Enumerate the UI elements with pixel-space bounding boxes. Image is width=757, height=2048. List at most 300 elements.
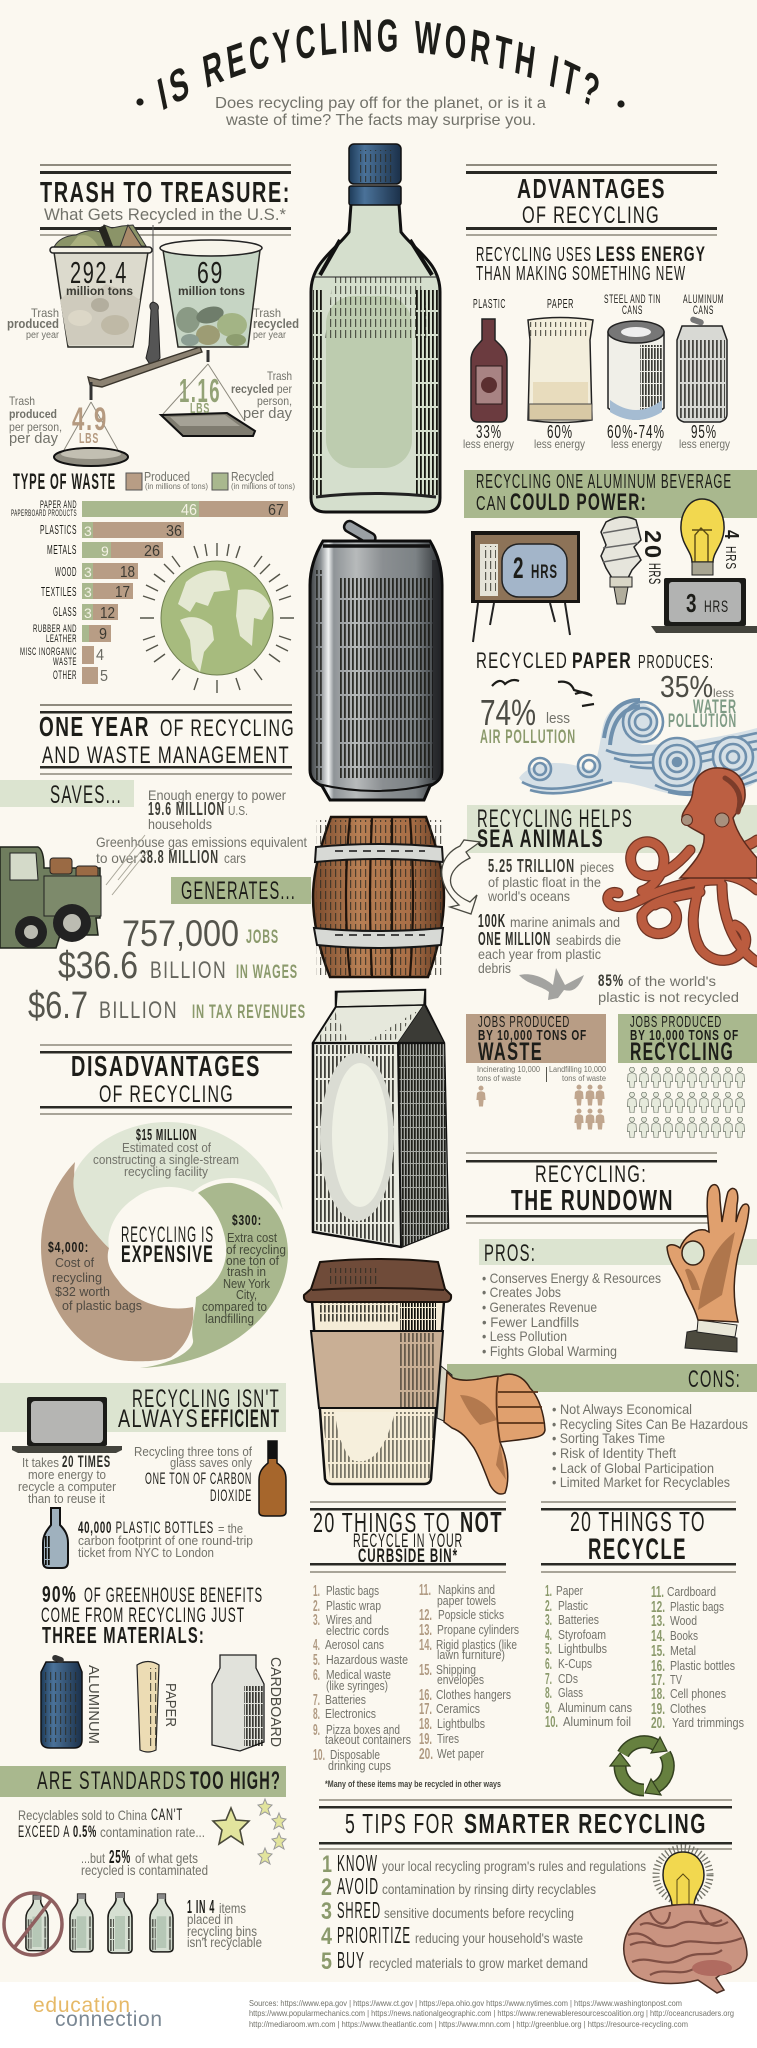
- text: energy for households: U.S.: [228, 803, 248, 818]
- banner: aluminum beverage can could power: [464, 470, 757, 518]
- bar labels: LEATHER: [46, 633, 77, 645]
- stat: 35% less water pollution: 35%: [660, 669, 713, 704]
- illustration: coffee cup: [304, 1259, 451, 1484]
- tip 5: recycled materials to grow market demand: [369, 1955, 588, 1971]
- text: 300 extra cost: compared to: [202, 1300, 267, 1314]
- stat: 757,000 jobs: 757,000: [122, 913, 239, 954]
- subheading: recycled paper produces: [476, 648, 714, 673]
- list: do not recycle column one: Plastic wrap: [326, 1598, 381, 1613]
- text: marine animals and seabirds: ONE MILLION: [478, 929, 551, 949]
- list: recycle column one: 2.: [545, 1598, 552, 1615]
- panel: 20 things to recycle: [541, 1501, 744, 1795]
- bar labels: MISC INORGANIC: [20, 646, 77, 658]
- list: do not recycle column two: 15.: [419, 1662, 432, 1679]
- icon: laptop 3 hrs: HRS: [704, 597, 729, 616]
- banner: efficient: [0, 1383, 286, 1433]
- list: do not recycle column one: Electronics: [325, 1706, 376, 1721]
- note: incinerating: Incinerating 10,000: [477, 1065, 540, 1074]
- list: do not recycle column one: 5.: [313, 1652, 320, 1669]
- text: 1 in 4 items: recycling bins: [187, 1923, 257, 1939]
- tip 3: SHRED: [337, 1897, 381, 1923]
- tip 2: AVOID: [337, 1873, 379, 1899]
- text: marine animals and seabirds: marine animals and: [510, 914, 620, 930]
- banner: saves: [0, 780, 134, 809]
- list: recycle column one: 7.: [545, 1671, 552, 1688]
- list: do not recycle column one: 7.: [313, 1692, 320, 1709]
- note: landfilling: tons of waste: [562, 1074, 607, 1083]
- bar chart: 5: [100, 668, 108, 685]
- list: do not recycle column two: Ceramics: [436, 1701, 480, 1716]
- list: do not recycle column one: 8.: [313, 1706, 320, 1723]
- legend: [126, 469, 295, 491]
- panel: are standards too high: [0, 1766, 286, 1955]
- tip 3: sensitive documents before recycling: [384, 1905, 574, 1921]
- stat: 292.4 million tons: [66, 255, 133, 298]
- icon: cfl bulb 20 hrs: HRS: [645, 563, 664, 585]
- list: pros: • Fewer Landfills: [482, 1314, 579, 1330]
- bar labels: METALS: [47, 542, 77, 557]
- list: do not recycle column two: [419, 1582, 519, 1763]
- stat: 1.16 lbs: LBS: [190, 400, 210, 417]
- text: energy for households: [148, 787, 286, 832]
- logo: education connection: education: [33, 1994, 130, 2017]
- list: recycle column two: Books: [670, 1628, 698, 1643]
- icon: tv 2 hrs: HRS: [531, 562, 558, 583]
- list: cons: • Lack of Global Participation: [552, 1460, 714, 1476]
- label: trash recycled per person per day: [231, 369, 292, 422]
- banner: sea animals: SEA ANIMALS: [477, 825, 604, 853]
- heading: to recycle: [541, 1501, 736, 1573]
- logo: education connection: [33, 1994, 162, 2031]
- stat: 36.6 billion wages: IN WAGES: [236, 962, 298, 983]
- list: do not recycle column two: Napkins and: [438, 1582, 495, 1597]
- banner: pros: [479, 1239, 757, 1267]
- icon: laptop 3 hrs: [651, 578, 757, 633]
- bar chart: 26: [144, 543, 160, 560]
- tip 5: BUY: [337, 1947, 365, 1973]
- list: pros: • Fights Global Warming: [482, 1343, 617, 1359]
- panel: recycling helps sea animals: [442, 768, 757, 1005]
- tip 4: 4: [321, 1923, 333, 1950]
- list: pros: • Conserves Energy & Resources: [482, 1270, 661, 1286]
- list: cons: • Sorting Takes Time: [552, 1430, 665, 1446]
- panel: trash to treasure: [7, 164, 299, 466]
- item: plastic energy: less energy: [463, 437, 514, 451]
- icon: recycle symbol: [610, 1737, 668, 1795]
- list: do not recycle column two: 14.: [419, 1637, 432, 1654]
- list: cons: • Risk of Identity Theft: [552, 1445, 676, 1461]
- list: do not recycle column one: Plastic bags: [326, 1583, 379, 1598]
- icon: octopus: [608, 768, 757, 962]
- icon: carton cardboard: CARDBOARD: [267, 1657, 284, 1747]
- note: incinerating: tons of waste: [477, 1074, 522, 1083]
- icon: cup of trash produced: [50, 225, 152, 347]
- label: trash recycled per person per day: person,: [257, 394, 292, 408]
- list: recycle column two: [651, 1584, 744, 1732]
- list: cons: • Limited Market for Recyclables: [552, 1474, 730, 1490]
- tip 4: [321, 1922, 583, 1950]
- icon: amber bottle: [259, 1441, 286, 1516]
- list: do not recycle column one: 1.: [313, 1583, 320, 1600]
- heading: 90 percent: 90%: [42, 1581, 77, 1607]
- bar chart: 17: [115, 584, 130, 601]
- text: 300 extra cost: one ton of: [226, 1254, 279, 1268]
- icon: brain with light bulb: [624, 1848, 747, 1993]
- text: 25 percent contaminated: recycled is contaminated: [81, 1862, 208, 1878]
- note: incinerating: [476, 1065, 540, 1106]
- item: steel and tin cans energy: CANS: [622, 303, 643, 317]
- banner: aluminum beverage can could power: COULD POWER:: [510, 489, 647, 516]
- text: china contamination: contamination rate...: [100, 1824, 205, 1840]
- stat: 757,000 jobs: JOBS: [246, 927, 279, 948]
- panel: 20 things to not recycle: [310, 1501, 519, 1789]
- list: do not recycle column one: Disposable: [330, 1747, 380, 1762]
- list: do not recycle column one: Pizza boxes and: [326, 1722, 400, 1737]
- stat: 35% less water pollution: less: [713, 686, 734, 700]
- text: 15 million: constructing a single-stream: [93, 1153, 239, 1167]
- list: do not recycle column one: 2.: [313, 1598, 320, 1615]
- text: 5.25 trillion pieces: of plastic float in the: [488, 874, 601, 890]
- list: pros: • Less Pollution: [482, 1328, 567, 1344]
- banner: sea animals: [467, 805, 757, 853]
- stat: 1.16 lbs: [179, 372, 221, 417]
- banner: efficient: ALWAYS: [118, 1405, 199, 1433]
- text: 300 extra cost: City,: [236, 1288, 257, 1302]
- list: recycle column two: TV: [670, 1672, 682, 1687]
- list: do not recycle column two: 13.: [419, 1622, 432, 1639]
- note: landfilling: Landfilling 10,000: [549, 1065, 607, 1074]
- banner: saves: SAVES...: [50, 781, 122, 809]
- illustration: milk carton: [313, 990, 448, 1247]
- tip 5: [321, 1947, 588, 1975]
- heading: rundown: RECYCLING:: [535, 1161, 647, 1188]
- banner: pros: PROS:: [484, 1240, 536, 1267]
- icon: light bulb 4 hrs: HRS: [722, 546, 739, 570]
- banner: generates: GENERATES...: [181, 877, 296, 905]
- heading: 90 percent: OF GREENHOUSE BENEFITS: [84, 1584, 263, 1607]
- bar labels: PAPERBOARD PRODUCTS: [11, 508, 77, 518]
- label: trash produced per year: Trash: [31, 306, 59, 320]
- stat: 4.9 lbs: 4.9: [72, 401, 108, 437]
- heading: advantages: ADVANTAGES: [517, 173, 666, 204]
- stat: 6.7 billion tax revenues: IN TAX REVENUES: [192, 1002, 306, 1023]
- label: trash recycled per year: recycled: [253, 316, 299, 331]
- text: 15 million: recycling facility: [124, 1165, 209, 1179]
- stat: 74% less air pollution: [480, 692, 576, 748]
- list: do not recycle column two: Wet paper: [437, 1746, 485, 1761]
- bar chart: 9: [99, 626, 107, 643]
- list: recycle column two: Clothes: [670, 1701, 706, 1716]
- bar chart: 12: [100, 605, 115, 622]
- text: 40000 plastic bottles: 40,000 PLASTIC BOTTLES: [78, 1518, 214, 1537]
- list: recycle column two: 17.: [651, 1672, 665, 1689]
- list: recycle column two: Cardboard: [667, 1584, 716, 1599]
- list: do not recycle column two: Tires: [437, 1731, 459, 1746]
- text: 40000 plastic bottles: = the: [218, 1521, 243, 1536]
- label: trash produced per year: [7, 306, 60, 341]
- text: china contamination: Recyclables sold to China: [18, 1807, 147, 1823]
- tip 2: contamination by rinsing dirty recyclables: [382, 1881, 596, 1897]
- list: do not recycle column two: 12.: [419, 1607, 432, 1624]
- list: recycle column two: 11.: [651, 1584, 664, 1601]
- list: do not recycle column two: envelopes: [437, 1672, 484, 1687]
- text: marine animals and seabirds: 100K: [478, 911, 506, 931]
- item: aluminum cans energy: 95%: [691, 422, 717, 442]
- heading: one year: [39, 704, 295, 775]
- text: greenhouse gas emissions: to over: [96, 850, 138, 866]
- banner: sea animals: RECYCLING HELPS: [477, 805, 633, 833]
- stat: 69 million tons: 69: [197, 255, 224, 290]
- item: plastic energy: PLASTIC: [473, 296, 506, 311]
- bar chart: 3: [84, 564, 92, 580]
- legend: Produced: [144, 469, 190, 484]
- icon: green globe: [140, 543, 294, 693]
- label: trash recycled per person per day: Trash: [267, 369, 292, 383]
- text: energy for households: Enough energy to power: [148, 787, 286, 803]
- list: recycle column one: 8.: [545, 1685, 552, 1702]
- text: center expensive: RECYCLING IS: [121, 1222, 214, 1247]
- text: 20 times energy: 20 TIMES: [62, 1452, 111, 1471]
- stat: 1.16 lbs: 1.16: [179, 372, 221, 409]
- footnote: *Many of these items may be recycled in other ways: [325, 1779, 501, 1789]
- text: 85 percent not recycled: [598, 971, 739, 1005]
- banner: efficient: EFFICIENT: [201, 1405, 280, 1433]
- heading: type of waste: TYPE OF WASTE: [13, 469, 116, 494]
- text: three tons of glass: [134, 1444, 252, 1505]
- text: 15 million: Estimated cost of: [122, 1141, 211, 1155]
- stat: 35% less water pollution: [660, 669, 737, 732]
- text: greenhouse gas emissions: cars: [224, 850, 246, 866]
- text: 300 extra cost: of recycling: [226, 1243, 286, 1257]
- list: do not recycle column one: 10.: [313, 1747, 325, 1764]
- heading: 5 tips: 5 TIPS FOR: [345, 1808, 455, 1839]
- list: do not recycle column one: [313, 1583, 411, 1773]
- list: recycle column one: 4.: [545, 1627, 552, 1644]
- text: energy for households: households: [148, 816, 212, 832]
- text: 25 percent contaminated: [81, 1847, 208, 1878]
- text: 40000 plastic bottles: carbon footprint of one round-trip: [78, 1533, 253, 1548]
- text: 1 in 4 items: placed in: [187, 1911, 233, 1927]
- text: 4000 cost: [48, 1239, 142, 1313]
- stat: 4.9 lbs: LBS: [79, 430, 99, 447]
- list: recycle column two: 18.: [651, 1686, 665, 1703]
- text: 300 extra cost: trash in: [227, 1265, 266, 1279]
- stat: 74% less air pollution: AIR POLLUTION: [480, 727, 576, 748]
- text: 20 times energy: recycle a computer: [18, 1479, 117, 1494]
- bar chart: 4: [96, 647, 104, 664]
- text: center expensive: [121, 1222, 214, 1268]
- item: paper energy: PAPER: [547, 296, 574, 311]
- text: greenhouse gas emissions: [96, 834, 307, 867]
- heading: rundown: [466, 1152, 717, 1224]
- list: pros: • Generates Revenue: [482, 1299, 597, 1315]
- subheading: recycled paper produces: PAPER: [572, 648, 632, 673]
- list: do not recycle column one: Medical waste: [326, 1667, 391, 1682]
- item: aluminum cans energy: ALUMINUM: [683, 292, 724, 306]
- label: trash produced per person per day: Trash: [9, 394, 35, 408]
- stat: 36.6 billion wages: [58, 945, 298, 987]
- bar labels: PLASTICS: [40, 522, 77, 537]
- icon: tv 2 hrs: [471, 531, 580, 642]
- text: 15 million: $15 MILLION: [136, 1127, 197, 1144]
- panel: the rundown: [437, 1152, 757, 1494]
- item: paper energy: [528, 296, 593, 451]
- bar labels: PAPER AND: [40, 499, 77, 511]
- note: landfilling: [546, 1065, 607, 1130]
- icon: thumbs down hand: [437, 1366, 545, 1494]
- list: recycle column two: Plastic bags: [670, 1599, 724, 1614]
- list: cons: [552, 1401, 748, 1490]
- item: aluminum cans energy: CANS: [693, 303, 714, 317]
- text: 40000 plastic bottles: ticket from NYC to London: [78, 1545, 214, 1560]
- item: paper energy: 60%: [547, 422, 573, 442]
- tip 1: [322, 1850, 646, 1878]
- text: 5.25 trillion pieces: [487, 856, 614, 904]
- list: do not recycle column one: (like syringes): [326, 1678, 388, 1693]
- list: do not recycle column two: Popsicle sticks: [438, 1607, 504, 1622]
- text: marine animals and seabirds: each year from plastic: [478, 946, 601, 962]
- list: recycle column one: Plastic: [558, 1598, 588, 1613]
- list: recycle column one: Glass: [558, 1685, 583, 1700]
- list: recycle column two: 19.: [651, 1701, 665, 1718]
- text: 300 extra cost: $300:: [232, 1212, 262, 1229]
- text: 25 percent contaminated: 25%: [109, 1847, 131, 1867]
- heading: one year: ONE YEAR: [39, 711, 150, 742]
- stat: 292.4 million tons: million tons: [66, 284, 133, 298]
- subheading: less energy: [476, 243, 706, 285]
- illustration: aluminum can: [310, 519, 442, 800]
- subtitle: [215, 95, 546, 129]
- text: 20 times energy: It takes: [22, 1455, 59, 1470]
- item: aluminum cans energy: [677, 292, 730, 451]
- list: do not recycle column two: Propane cylinders: [437, 1622, 519, 1637]
- stat: 69 million tons: million tons: [178, 284, 245, 298]
- heading: disadvantages: DISADVANTAGES: [71, 1051, 261, 1083]
- list: do not recycle column two: Clothes hangers: [436, 1687, 511, 1702]
- tip 3: 3: [321, 1898, 332, 1925]
- text: 1 in 4 items: items: [219, 1900, 246, 1916]
- icon: seagull: [519, 968, 584, 1000]
- tip 1: 1: [322, 1851, 332, 1878]
- heading: 90 percent: [41, 1581, 263, 1648]
- list: recycle column one: Aluminum foil: [563, 1714, 631, 1729]
- list: recycle column two: Wood: [670, 1613, 697, 1628]
- label: trash produced per year: per year: [26, 330, 60, 341]
- bar chart: 36: [166, 523, 182, 540]
- text: center expensive: EXPENSIVE: [121, 1241, 214, 1268]
- stat: 4.9 lbs: [72, 401, 108, 447]
- text: 1 in 4 items: isn't recyclable: [187, 1934, 262, 1950]
- bar labels: [11, 499, 77, 682]
- list: recycle column two: 12.: [651, 1599, 665, 1616]
- bar chart: 3: [84, 605, 92, 621]
- stat: 6.7 billion tax revenues: [28, 985, 306, 1027]
- list: pros: • Creates Jobs: [482, 1284, 561, 1300]
- list: do not recycle column two: Shipping: [436, 1662, 476, 1677]
- chart: recycling is expensive swirl: [41, 1122, 288, 1368]
- list: do not recycle column one: Batteries: [325, 1692, 366, 1707]
- heading: 5 tips: [319, 1799, 732, 1850]
- bar chart: 3: [84, 523, 92, 539]
- panel: type of waste chart: GLASS: [53, 604, 77, 619]
- logo: education connection: connection: [55, 2008, 162, 2031]
- list: do not recycle column two: 19.: [419, 1731, 432, 1748]
- list: do not recycle column one: 3.: [313, 1612, 320, 1629]
- text: 40000 plastic bottles: [78, 1518, 253, 1560]
- list: pros: [482, 1270, 661, 1359]
- legend: (in millions of tons): [231, 482, 295, 491]
- item: plastic energy: [463, 296, 514, 451]
- panel: disadvantages of recycling: [40, 1044, 292, 1368]
- list: do not recycle column two: Rigid plastics (like: [436, 1637, 517, 1652]
- icon: ok hand: [667, 1185, 749, 1352]
- label: trash produced per person per day: per person,: [9, 420, 62, 434]
- legend: Recycled: [231, 469, 274, 484]
- panel: recycling isn't always efficient: [0, 1383, 286, 1568]
- footer background: [0, 1982, 757, 2048]
- list: do not recycle column two: 11.: [419, 1582, 431, 1599]
- panel: type of waste chart: WOOD: [55, 564, 77, 579]
- tip 1: KNOW: [337, 1850, 378, 1876]
- bar labels: WASTE: [53, 656, 77, 668]
- item: paper energy: less energy: [534, 437, 585, 451]
- bar chart: 18: [120, 564, 135, 581]
- stat: 292.4 million tons: 292.4: [70, 255, 128, 290]
- list: recycle column one: [545, 1583, 632, 1731]
- list: recycle column two: Metal: [670, 1643, 696, 1658]
- heading: disadvantages: [40, 1044, 292, 1115]
- tip 5: 5: [321, 1948, 332, 1975]
- heading: one year: AND WASTE MANAGEMENT: [42, 742, 290, 769]
- icon: waves: [519, 700, 757, 797]
- list: do not recycle column two: 16.: [419, 1687, 432, 1704]
- icon: tv 2 hrs: 2: [513, 552, 525, 585]
- icon: laptop: [12, 1397, 122, 1453]
- heading: not recycle: 20 THINGS TO: [313, 1507, 451, 1538]
- text: 4000 cost: Cost of: [55, 1255, 94, 1270]
- panel: three materials: [41, 1581, 284, 1752]
- list: do not recycle column two: 18.: [419, 1716, 432, 1733]
- subheading: recycled paper produces: RECYCLED: [476, 648, 568, 673]
- banner: jobs waste: BY 10,000 TONS OF: [478, 1027, 587, 1044]
- list: recycle column one: 6.: [545, 1656, 552, 1673]
- subtitle: waste of time? The facts may surprise you.: [225, 112, 536, 129]
- list: do not recycle column one: 6.: [313, 1667, 320, 1684]
- icon: laptop 3 hrs: 3: [686, 588, 698, 618]
- list: do not recycle column one: electric cords: [326, 1623, 389, 1638]
- text: 20 times energy: more energy to: [28, 1467, 106, 1482]
- list: recycle column one: 10.: [545, 1714, 558, 1731]
- text: 4000 cost: $4,000:: [48, 1239, 89, 1256]
- banner: generates: [171, 877, 311, 905]
- list: do not recycle column two: 20.: [419, 1746, 433, 1763]
- label: trash produced per year: produced: [7, 316, 59, 331]
- icon: carton cardboard: [212, 1655, 284, 1751]
- banner: standards: TOO HIGH?: [190, 1767, 281, 1795]
- label: trash produced per person per day: [9, 394, 62, 447]
- list: cons: • Not Always Economical: [552, 1401, 692, 1417]
- label: trash recycled per year: per year: [253, 330, 287, 341]
- list: do not recycle column one: Wires and: [326, 1612, 372, 1627]
- title: IS RECYCLING WORTH IT?: [157, 19, 599, 110]
- item: aluminum cans energy: less energy: [679, 437, 730, 451]
- icon: light bulb 4 hrs: [681, 499, 742, 575]
- label: trash produced per person per day: produced: [9, 407, 57, 421]
- icon: flying birds: [492, 680, 594, 706]
- icon: light bulb 4 hrs: 4: [720, 530, 742, 540]
- list: recycle column one: Lightbulbs: [558, 1641, 607, 1656]
- banner: jobs waste: [466, 1014, 606, 1066]
